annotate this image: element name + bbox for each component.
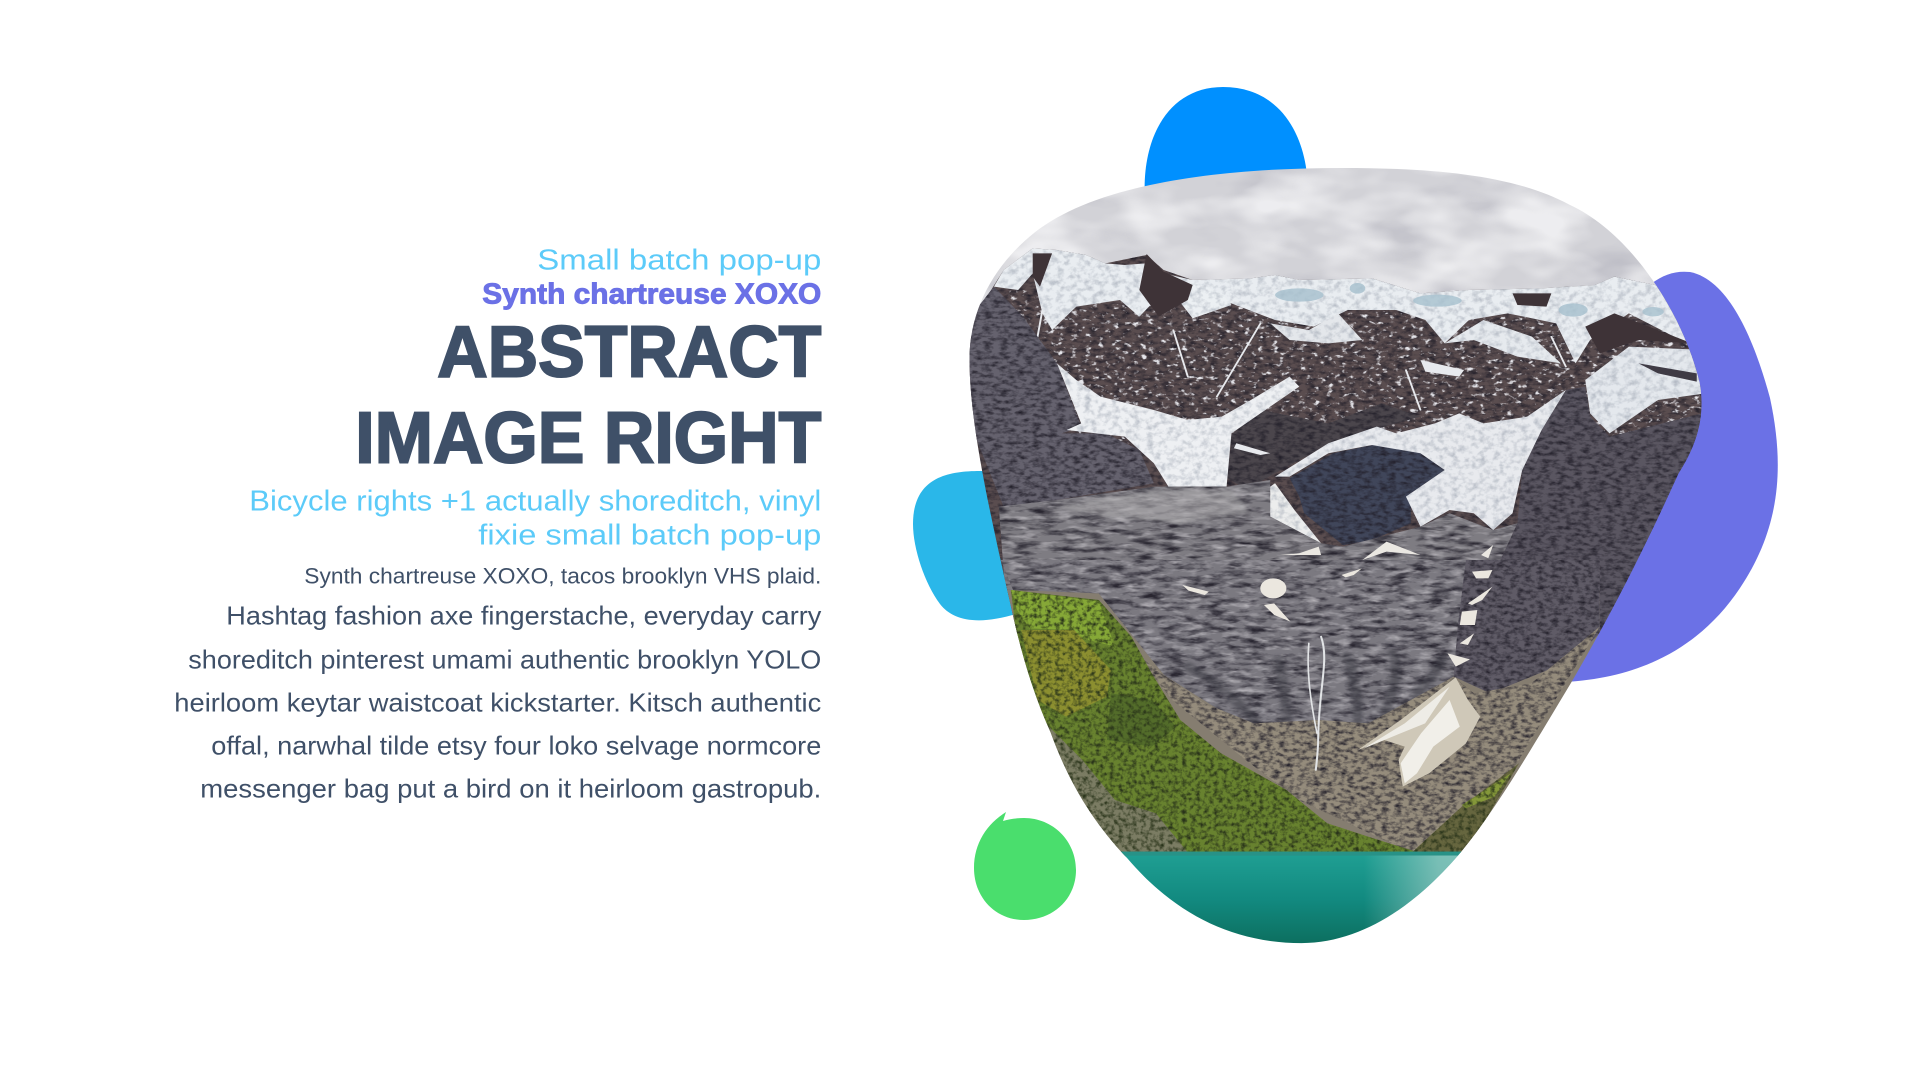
dark buttresses bbox=[960, 287, 1716, 633]
left glacier bbox=[1057, 363, 1299, 487]
body paragraph bbox=[174, 600, 821, 804]
lower valley bbox=[1001, 560, 1600, 947]
kicker: small batch: Small batch pop-up bbox=[537, 244, 821, 276]
right green slope bbox=[1413, 763, 1519, 853]
lead sentence: Bicycle rights +1 actually shoreditch, vinyl bbox=[249, 486, 821, 518]
pale moraine band under glacier bbox=[1057, 490, 1251, 523]
title bbox=[355, 312, 821, 478]
lead sentence: fixie small batch pop-up bbox=[478, 520, 821, 552]
scree valley floor bbox=[1135, 627, 1600, 852]
lake bbox=[1095, 852, 1486, 947]
title: IMAGE RIGHT bbox=[355, 398, 821, 478]
decorative blob: purple right bbox=[1565, 272, 1778, 682]
moraine and lower rock bbox=[999, 480, 1517, 633]
snow streaks on rock bbox=[1038, 310, 1566, 410]
caption line: Synth chartreuse XOXO, tacos brooklyn VHS plaid. bbox=[304, 564, 821, 588]
glaciers bbox=[1057, 347, 1706, 543]
dark peaks bbox=[1033, 253, 1692, 353]
rock face bbox=[960, 248, 1716, 633]
valley base fill bbox=[1001, 590, 1600, 857]
body paragraph: shoreditch pinterest umami authentic brooklyn YOLO bbox=[188, 644, 821, 674]
central glacier bbox=[1275, 390, 1566, 530]
body paragraph: offal, narwhal tilde etsy four loko selvage normcore bbox=[211, 730, 821, 760]
subtitle: synth chartreuse: Synth chartreuse XOXO bbox=[482, 278, 821, 310]
body paragraph: heirloom keytar waistcoat kickstarter. Kitsch authentic bbox=[174, 688, 821, 718]
lead sentence bbox=[249, 486, 821, 552]
decorative blob: green speech circle bbox=[974, 812, 1076, 920]
waterfall bbox=[1308, 637, 1324, 770]
central dark rock bbox=[1290, 443, 1445, 545]
photo: mountain lake clipped to abstract blob bbox=[960, 160, 1720, 947]
sky with clouds bbox=[980, 168, 1681, 330]
grey cliff bbox=[1001, 560, 1474, 727]
snow speckle on rock bbox=[1008, 290, 1702, 443]
title: ABSTRACT bbox=[437, 312, 821, 392]
snow patches bbox=[1182, 568, 1492, 667]
right glacier bbox=[1585, 347, 1706, 433]
snow cone bbox=[1358, 677, 1480, 787]
left buttress bbox=[960, 287, 1154, 507]
green slope bbox=[1011, 590, 1421, 857]
body paragraph: Hashtag fashion axe fingerstache, everyday carry bbox=[226, 600, 821, 630]
snow cap along ridge bbox=[994, 248, 1702, 363]
dark cliff gullies bbox=[1188, 653, 1441, 720]
small snow patches bbox=[1280, 542, 1494, 560]
body paragraph: messenger bag put a bird on it heirloom gastropub. bbox=[200, 774, 821, 804]
snow tongue bbox=[1270, 483, 1321, 543]
ledge below upper face bbox=[1226, 403, 1420, 490]
dark right cliff bbox=[1454, 560, 1600, 693]
decorative blob: blue top bbox=[1145, 87, 1308, 200]
blue ice patches bbox=[1275, 283, 1664, 317]
upper mountain bbox=[960, 248, 1716, 633]
right buttress bbox=[1483, 387, 1716, 633]
text block: headings and paragraph bbox=[174, 244, 821, 804]
decorative blob: light blue left bbox=[913, 471, 1035, 620]
